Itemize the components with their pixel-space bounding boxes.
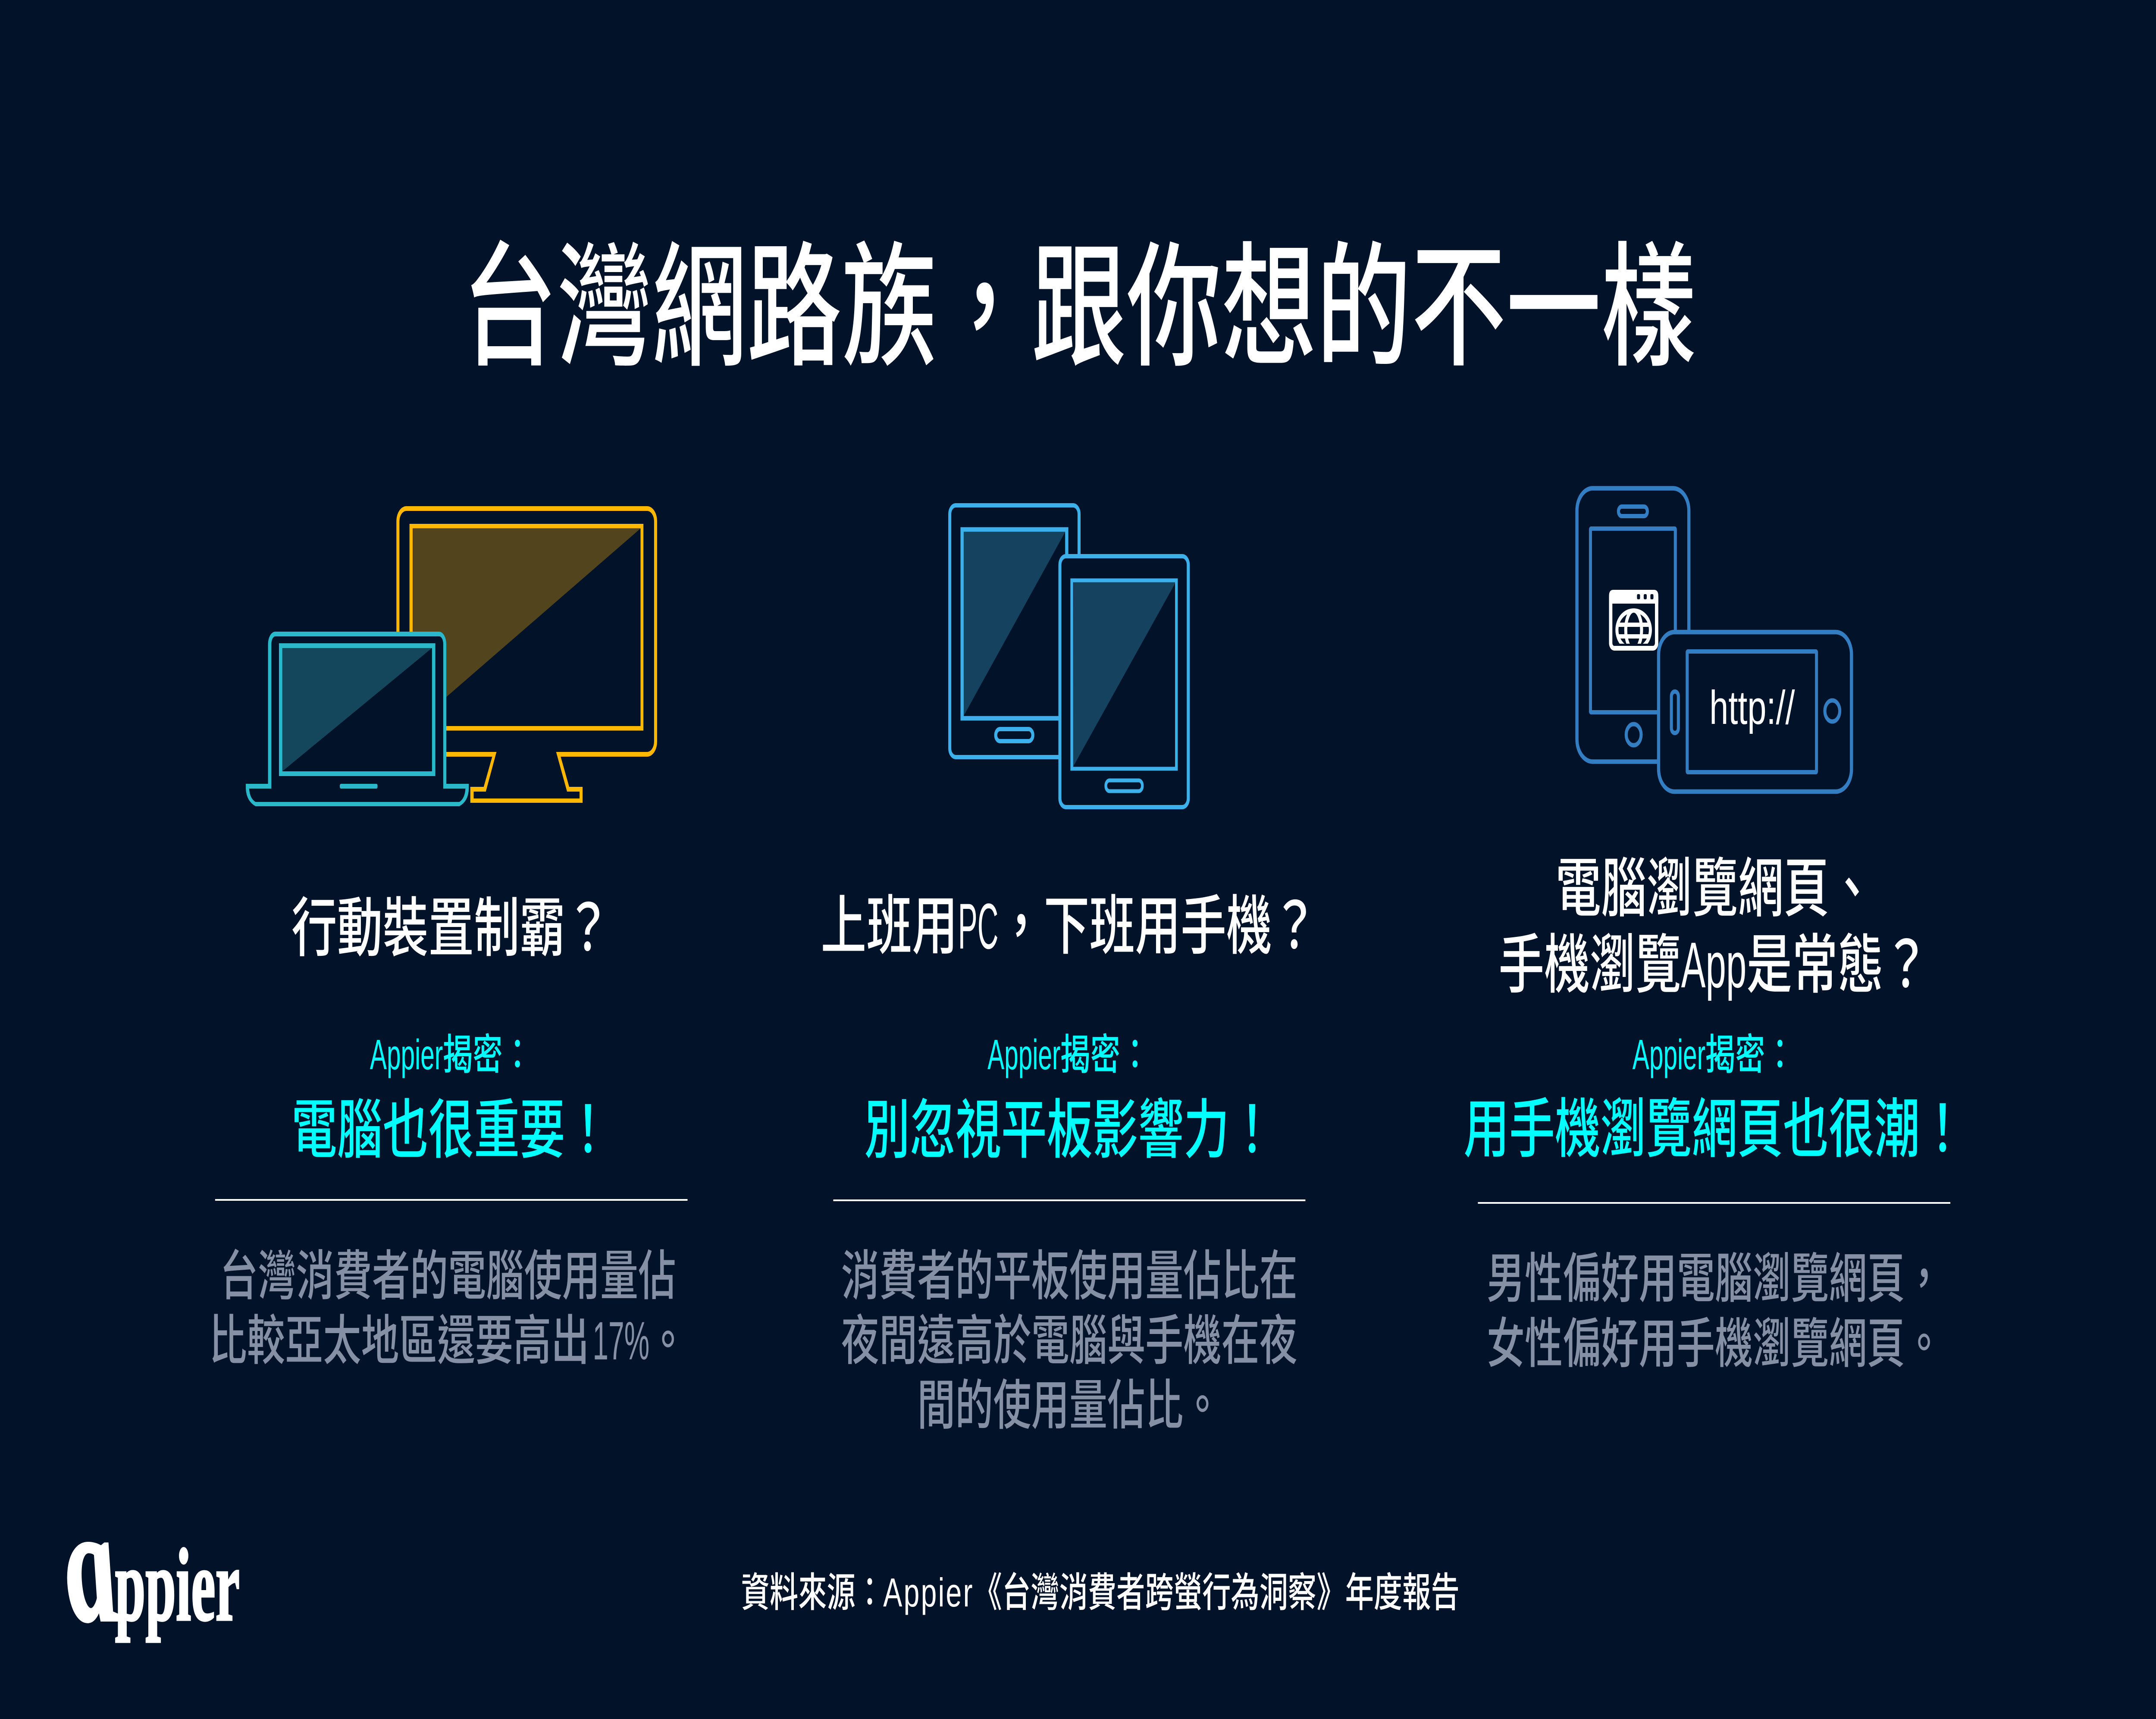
icon: portrait phone xyxy=(1577,488,1689,761)
source footnote xyxy=(741,1570,1460,1616)
Appier reveal label: 揭密： xyxy=(443,1031,533,1078)
body text xyxy=(841,1246,1297,1436)
body text: 消費者的平板使用量佔比在 xyxy=(841,1246,1297,1306)
cyan answer heading: 別忽視平板影響力！ xyxy=(864,1094,1275,1166)
Appier reveal label: Appier xyxy=(1633,1031,1705,1078)
icon: web browser globe xyxy=(1609,590,1658,649)
icon: desktop monitor xyxy=(396,506,657,803)
Appier reveal label: Appier xyxy=(987,1031,1060,1078)
http label: http:// xyxy=(1709,682,1795,734)
panel: column 3 phones xyxy=(1463,488,1965,1374)
icon: front tablet xyxy=(1060,556,1188,807)
body text: 女性偏好用手機瀏覽網頁。 xyxy=(1487,1314,1943,1374)
body text: 比較亞太地區還要高出 xyxy=(209,1311,589,1371)
Appier reveal label: 揭密： xyxy=(1060,1031,1150,1078)
panel: column 2 tablets xyxy=(821,505,1318,1436)
Appier reveal label: 揭密： xyxy=(1705,1031,1795,1078)
cyan answer heading: 用手機瀏覽網頁也很潮！ xyxy=(1463,1093,1965,1165)
icon: two phones xyxy=(1577,488,1852,792)
question heading xyxy=(1498,852,1929,1001)
icon: desktop monitor and laptop xyxy=(246,506,657,806)
source footnote: 資料來源： xyxy=(741,1570,884,1616)
question heading: ，下班用手機？ xyxy=(998,890,1318,962)
source footnote: Appier xyxy=(883,1570,973,1616)
body text xyxy=(209,1246,687,1371)
logo: Appier: ppier xyxy=(115,1528,240,1642)
question heading: 是常態？ xyxy=(1746,929,1929,1001)
logo: Appier: a xyxy=(48,1476,129,1655)
question heading: 行動裝置制霸？ xyxy=(291,892,611,964)
icon: landscape phone xyxy=(1658,632,1852,792)
question heading xyxy=(821,890,1318,962)
logo: Appier xyxy=(48,1476,240,1655)
question heading: App xyxy=(1681,929,1746,1001)
panel: column 1 computers xyxy=(209,506,687,1371)
question heading: 手機瀏覽 xyxy=(1498,929,1681,1001)
icon: back tablet xyxy=(950,505,1079,757)
body text: 男性偏好用電腦瀏覽網頁， xyxy=(1487,1249,1943,1309)
body text: 台灣消費者的電腦使用量佔 xyxy=(220,1246,676,1306)
question heading: 電腦瀏覽網頁、 xyxy=(1555,852,1875,925)
body text: 17% xyxy=(592,1311,649,1371)
cyan answer heading: 電腦也很重要！ xyxy=(291,1094,611,1166)
Appier reveal label xyxy=(987,1031,1150,1078)
title: 台灣網路族，跟你想的不一樣 xyxy=(462,233,1696,383)
Appier reveal label xyxy=(1633,1031,1795,1078)
icon: laptop xyxy=(246,632,469,806)
question heading: 上班用 xyxy=(821,890,958,962)
icon: two tablets xyxy=(950,505,1188,807)
Appier reveal label xyxy=(370,1031,533,1078)
question heading: PC xyxy=(958,890,999,962)
Appier reveal label: Appier xyxy=(370,1031,443,1078)
body text xyxy=(1487,1249,1943,1374)
source footnote: 《台灣消費者跨螢行為洞察》年度報告 xyxy=(974,1570,1460,1616)
body text: 夜間遠高於電腦與手機在夜 xyxy=(841,1311,1297,1371)
body text: 間的使用量佔比。 xyxy=(917,1375,1222,1436)
body text: 。 xyxy=(649,1311,687,1371)
